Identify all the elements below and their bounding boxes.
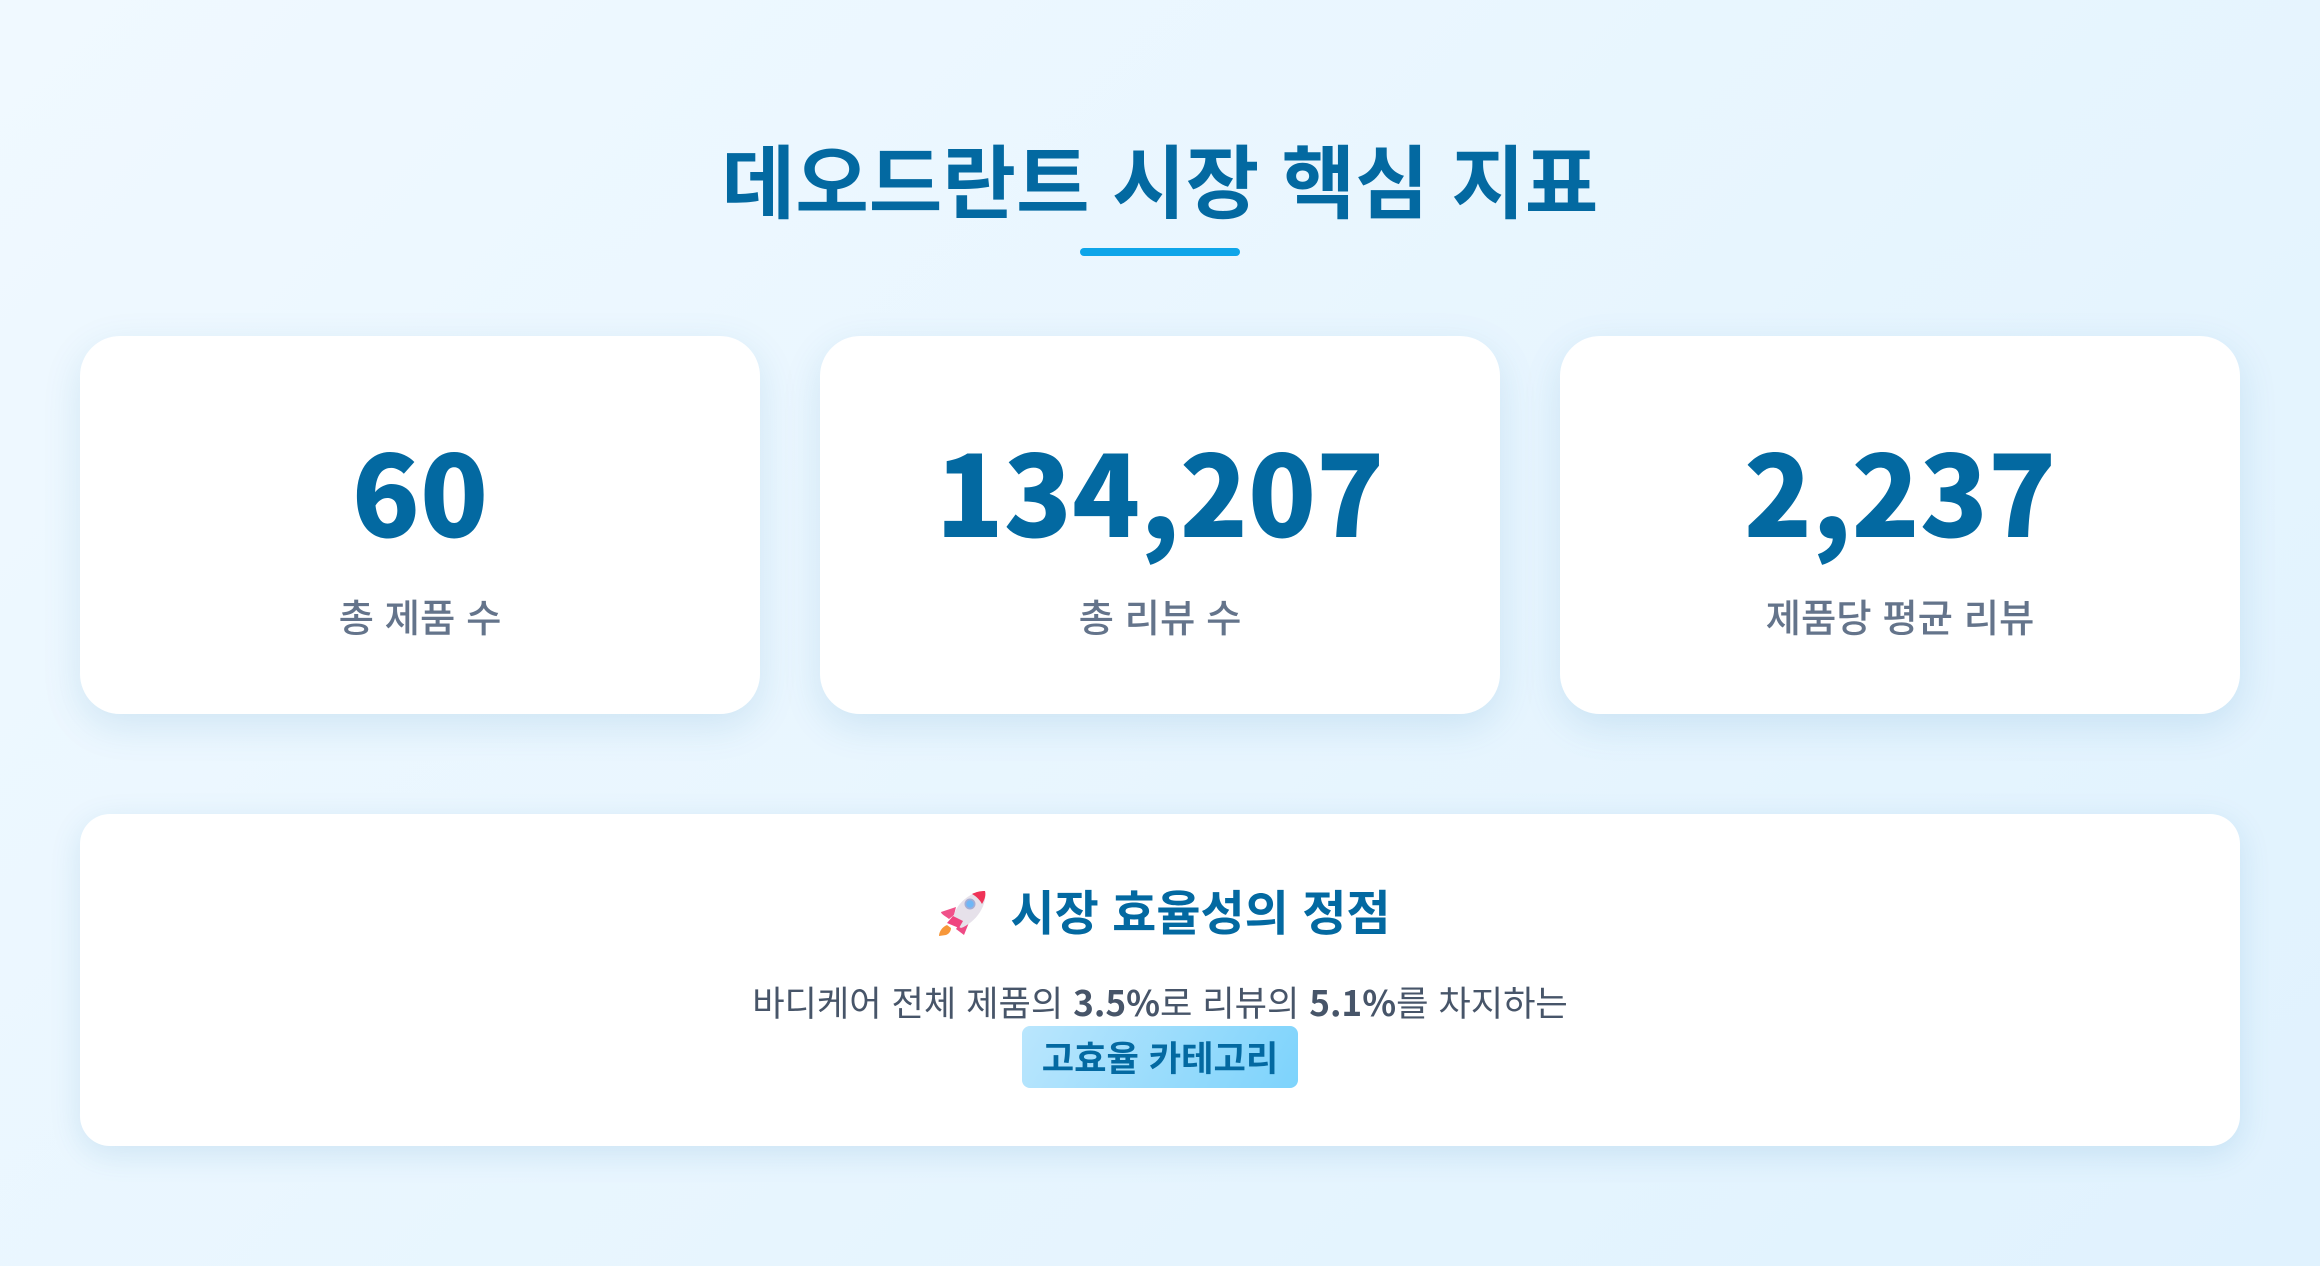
feature heading: 시장 효율성의 정점 (1010, 874, 1391, 944)
feature description: 바디케어 전체 제품의 3.5%로 리뷰의 5.1%를 차지하는 (752, 976, 1568, 1027)
stat label: total products: 총 제품 수 (339, 588, 501, 644)
panel: market efficiency (80, 814, 2240, 1146)
icon: rocket (939, 891, 986, 936)
panel: average reviews per product (1560, 336, 2240, 714)
panel: total products (80, 336, 760, 714)
title: 데오드란트 시장 핵심 지표 (722, 120, 1598, 236)
stat value: total products: 60 (352, 408, 488, 570)
stat value: average reviews: 2,237 (1744, 408, 2056, 570)
stat label: average reviews: 제품당 평균 리뷰 (1766, 588, 2034, 644)
panel: total reviews (820, 336, 1500, 714)
highlight badge: 고효율 카테고리 (1042, 1031, 1278, 1082)
stat value: total reviews: 134,207 (936, 408, 1384, 570)
stat label: total reviews: 총 리뷰 수 (1079, 588, 1241, 644)
title underline (1080, 248, 1240, 256)
